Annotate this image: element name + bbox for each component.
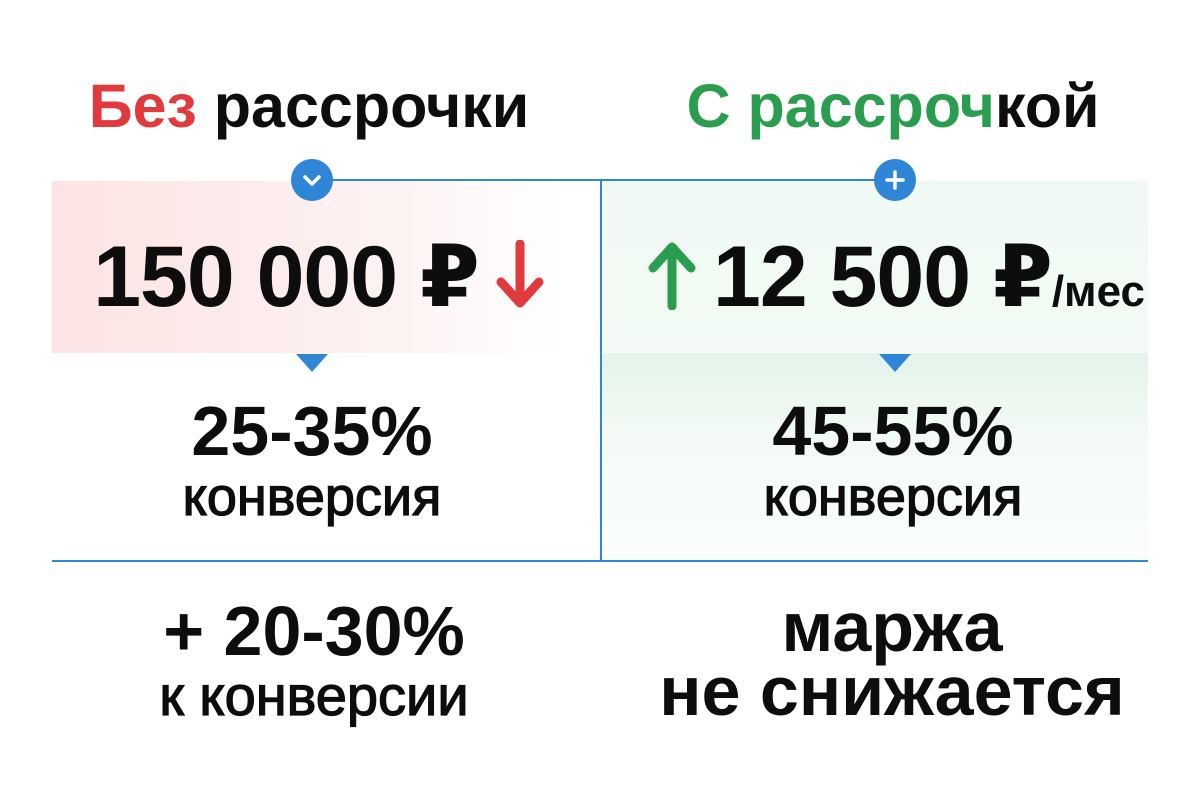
heading: right: С рассрочкой (687, 72, 1099, 140)
icon: plus circle (874, 159, 916, 201)
price: left: 150 000 ₽ (93, 229, 479, 325)
bottom: right (659, 588, 1125, 730)
stat: right conversion (764, 392, 1022, 527)
bottom: right: не снижается (659, 652, 1125, 730)
icon: down chevron circle (291, 159, 333, 201)
panel: left price box (52, 181, 560, 353)
bottom: left: к конверсии (159, 664, 469, 727)
stat: right conversion: 45-55% (772, 392, 1014, 470)
stat: left conversion: 25-35% (191, 392, 433, 470)
stat: left conversion (183, 392, 441, 527)
panel: right column background (601, 181, 1148, 560)
icon: right triangle (879, 354, 911, 372)
price: right: 12 500 ₽/мес (713, 229, 1145, 325)
heading: left: Без рассрочки (89, 72, 529, 140)
bottom: left: + 20-30% (163, 592, 465, 670)
stat: left conversion: конверсия (183, 467, 441, 527)
bottom: right: маржа (781, 588, 1003, 666)
stat: right conversion: конверсия (764, 467, 1022, 527)
icon: left triangle (296, 354, 328, 372)
bottom: left (159, 592, 469, 728)
